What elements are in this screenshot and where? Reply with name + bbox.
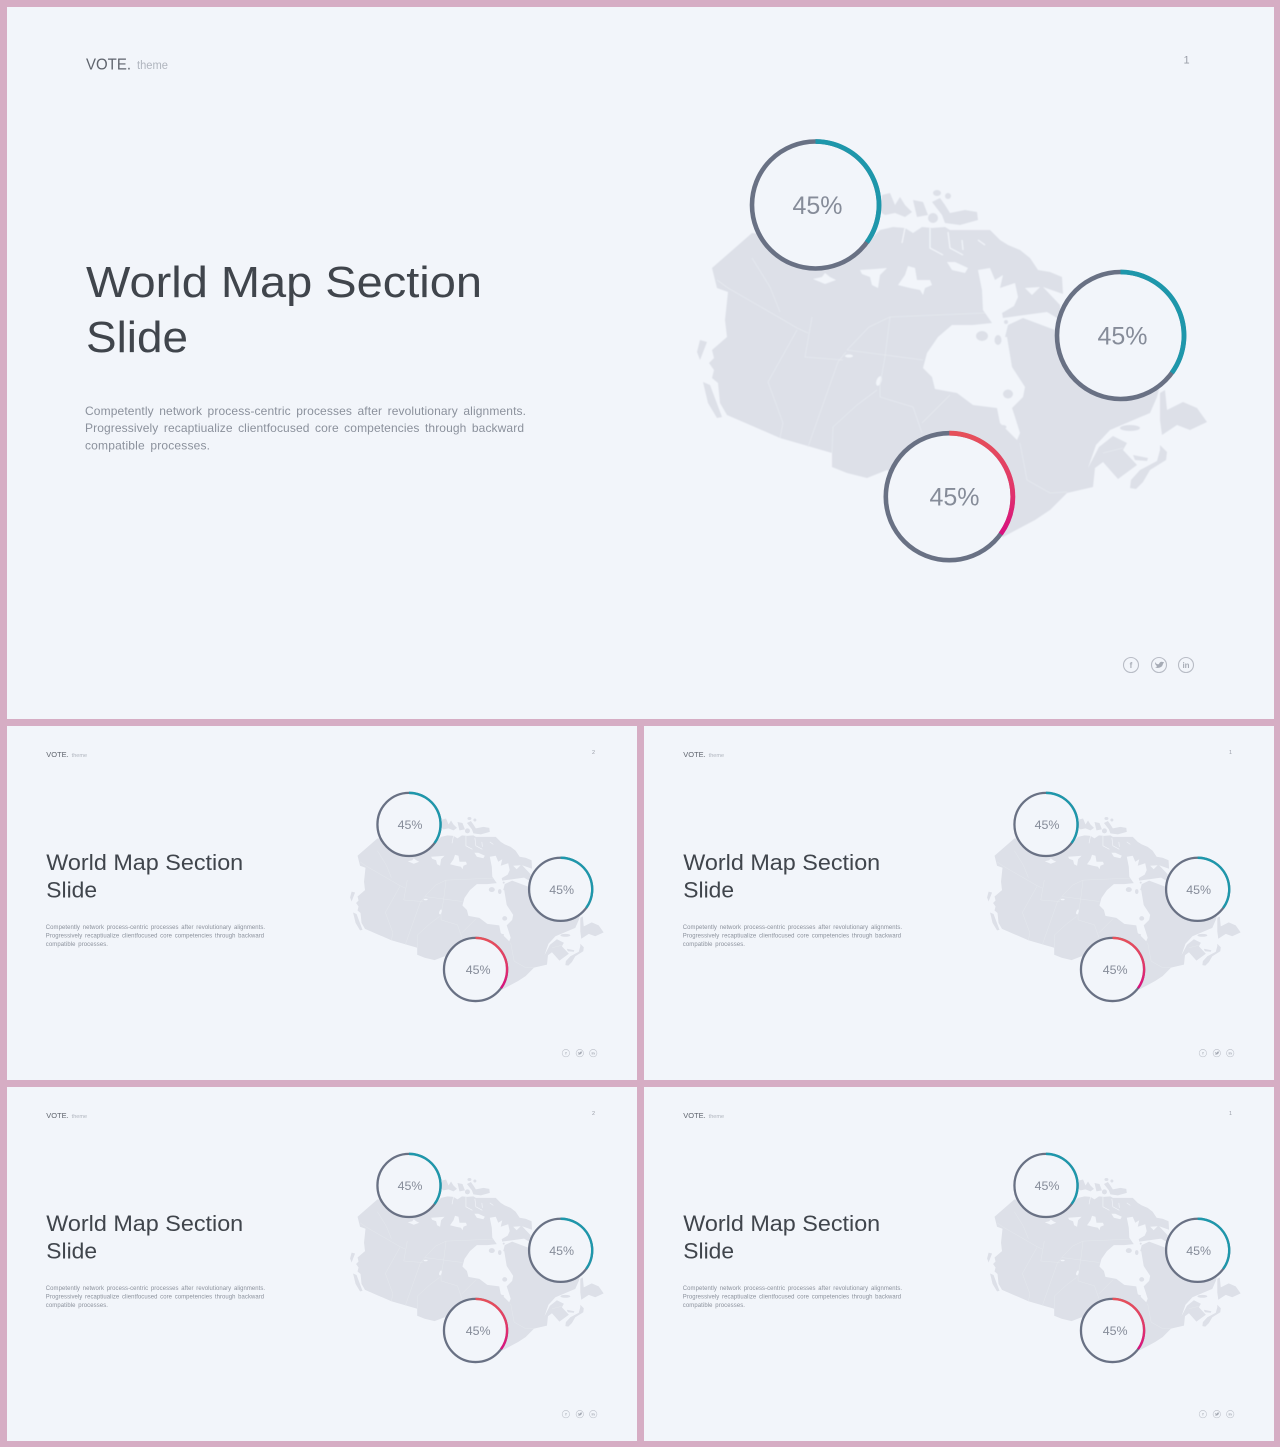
brand logo — [683, 750, 724, 759]
social icons — [562, 1049, 597, 1057]
brand logo: VOTE. — [86, 56, 131, 74]
page number: 1 — [1184, 54, 1190, 66]
brand logo: VOTE. — [46, 750, 69, 759]
social icons: f — [565, 1412, 567, 1417]
title — [46, 850, 243, 903]
donut marker: east 45%: 45% — [1097, 322, 1148, 350]
brand logo — [46, 750, 87, 759]
donut marker: north-west 45% — [377, 1154, 441, 1217]
donut marker: east 45%: 45% — [549, 883, 574, 897]
title — [86, 258, 482, 362]
description text: Progressively recaptiualize clientfocused core competencies through backward — [683, 933, 901, 939]
social icons: in — [591, 1412, 596, 1417]
donut marker: south 45% — [1081, 1299, 1144, 1362]
description text — [85, 404, 526, 452]
map of Canada — [987, 1178, 1241, 1351]
page number: 1 — [1229, 750, 1232, 756]
panel: small slide top right — [644, 726, 1274, 1080]
donut marker: south 45%: 45% — [1103, 963, 1128, 977]
social icons: in — [1228, 1412, 1233, 1417]
title: Slide — [683, 878, 734, 903]
donut marker: east 45% — [1057, 272, 1184, 399]
donut marker: east 45%: 45% — [1186, 1244, 1211, 1258]
description text — [46, 1286, 265, 1309]
description text: compatible processes. — [46, 942, 108, 948]
map of Canada — [350, 1178, 604, 1351]
page number: 1 — [1229, 1111, 1232, 1117]
social icons: f — [1130, 661, 1133, 670]
title: World Map Section — [46, 850, 243, 875]
description text: compatible processes. — [85, 438, 210, 452]
title — [683, 1211, 880, 1264]
donut marker: north-west 45% — [1014, 1154, 1078, 1217]
description text: compatible processes. — [46, 1303, 108, 1309]
brand logo: VOTE. — [46, 1111, 69, 1120]
panel: small slide bottom left — [7, 1087, 637, 1441]
donut marker: east 45%: 45% — [1186, 883, 1211, 897]
description text: Progressively recaptiualize clientfocused core competencies through backward — [46, 1294, 264, 1300]
social icons — [1199, 1410, 1234, 1418]
brand logo: theme — [72, 753, 87, 759]
panel: main slide — [7, 7, 1274, 719]
title: Slide — [86, 313, 188, 362]
donut marker: east 45% — [1166, 1219, 1229, 1282]
donut marker: east 45%: 45% — [549, 1244, 574, 1258]
social icons — [1199, 1049, 1234, 1057]
brand logo: theme — [709, 1114, 724, 1120]
panel: small slide bottom right — [644, 1087, 1274, 1441]
social icons: f — [565, 1051, 567, 1056]
title: World Map Section — [683, 1211, 880, 1236]
social icons: f — [1202, 1412, 1204, 1417]
brand logo — [86, 56, 168, 74]
donut marker: north-west 45%: 45% — [1035, 818, 1059, 832]
donut marker: north-west 45%: 45% — [792, 192, 843, 220]
donut marker: south 45% — [444, 938, 507, 1001]
map of Canada — [987, 817, 1241, 990]
map of Canada — [350, 817, 604, 990]
title: Slide — [46, 1239, 97, 1264]
social icons: in — [1182, 661, 1190, 670]
social icons — [1124, 658, 1194, 672]
social icons: f — [1202, 1051, 1204, 1056]
title: World Map Section — [683, 850, 880, 875]
donut marker: south 45% — [444, 1299, 507, 1362]
title: Slide — [683, 1239, 734, 1264]
brand logo: theme — [709, 753, 724, 759]
donut marker: south 45%: 45% — [466, 1324, 491, 1338]
donut marker: south 45%: 45% — [466, 963, 491, 977]
brand logo — [683, 1111, 724, 1120]
donut marker: north-west 45%: 45% — [1035, 1179, 1059, 1193]
social icons: in — [591, 1051, 596, 1056]
description text — [683, 925, 902, 948]
donut marker: south 45% — [1081, 938, 1144, 1001]
brand logo: VOTE. — [683, 750, 706, 759]
donut marker: north-west 45% — [1014, 793, 1078, 856]
page number: 2 — [592, 1111, 595, 1117]
title: Slide — [46, 878, 97, 903]
title: World Map Section — [86, 258, 482, 307]
map of Canada — [697, 190, 1207, 537]
donut marker: north-west 45%: 45% — [398, 818, 422, 832]
panel: small slide top left — [7, 726, 637, 1080]
brand logo: theme — [72, 1114, 87, 1120]
description text — [46, 925, 265, 948]
description text: compatible processes. — [683, 942, 745, 948]
description text: Progressively recaptiualize clientfocused core competencies through backward — [683, 1294, 901, 1300]
donut marker: south 45% — [886, 433, 1013, 560]
description text: Competently network process-centric processes after revolutionary alignments. — [683, 925, 902, 931]
social icons: in — [1228, 1051, 1233, 1056]
description text: Competently network process-centric processes after revolutionary alignments. — [46, 925, 265, 931]
description text: compatible processes. — [683, 1303, 745, 1309]
title — [683, 850, 880, 903]
donut marker: east 45% — [529, 858, 592, 921]
title — [46, 1211, 243, 1264]
page number: 2 — [592, 750, 595, 756]
title: World Map Section — [46, 1211, 243, 1236]
donut marker: north-west 45% — [377, 793, 441, 856]
social icons — [562, 1410, 597, 1418]
description text: Competently network process-centric processes after revolutionary alignments. — [46, 1286, 265, 1292]
donut marker: north-west 45%: 45% — [398, 1179, 422, 1193]
brand logo: theme — [137, 60, 168, 72]
donut marker: south 45%: 45% — [1103, 1324, 1128, 1338]
description text: Progressively recaptiualize clientfocused core competencies through backward — [85, 421, 524, 435]
donut marker: east 45% — [1166, 858, 1229, 921]
brand logo — [46, 1111, 87, 1120]
donut marker: north-west 45% — [752, 142, 879, 268]
donut marker: south 45%: 45% — [929, 484, 980, 512]
description text — [683, 1286, 902, 1309]
description text: Competently network process-centric processes after revolutionary alignments. — [85, 404, 526, 418]
donut marker: east 45% — [529, 1219, 592, 1282]
brand logo: VOTE. — [683, 1111, 706, 1120]
description text: Progressively recaptiualize clientfocused core competencies through backward — [46, 933, 264, 939]
description text: Competently network process-centric processes after revolutionary alignments. — [683, 1286, 902, 1292]
